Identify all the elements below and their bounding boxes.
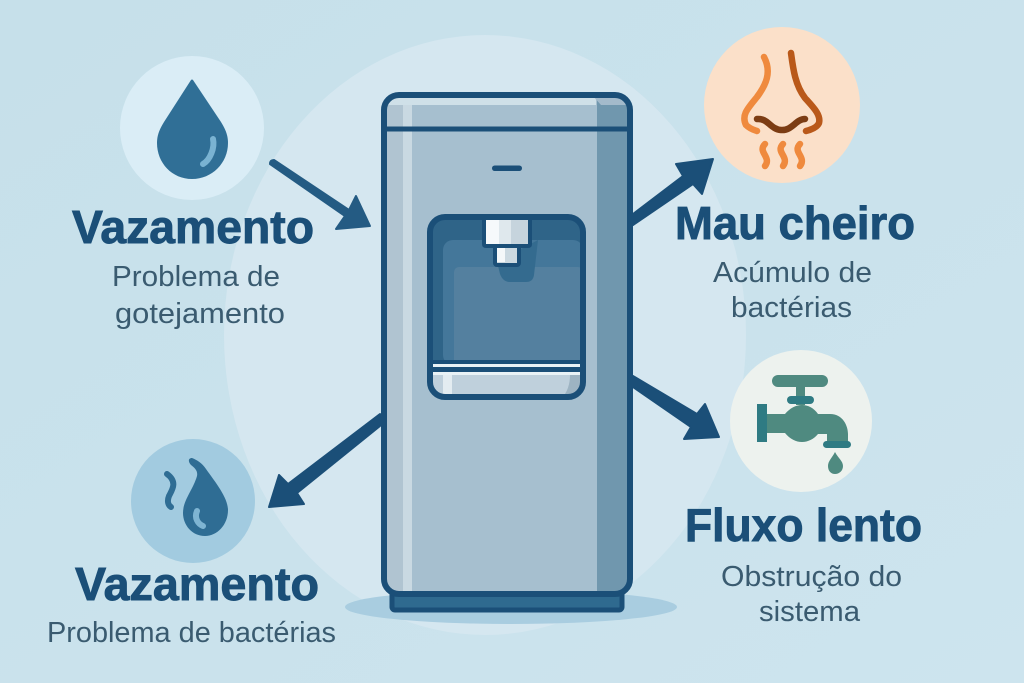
arrow: bottom right — [633, 376, 719, 439]
arrow: top right — [633, 159, 713, 225]
heading: Vazamento — [75, 558, 319, 610]
dispenser window — [430, 217, 583, 397]
icon: water drop — [120, 56, 264, 200]
panel: mau cheiro — [675, 27, 915, 324]
description: gotejamento — [115, 298, 285, 330]
heading: Vazamento — [72, 201, 314, 253]
indicator — [492, 166, 522, 171]
arrow: top left — [270, 160, 370, 229]
description: Problema de — [112, 261, 280, 293]
cooler base — [392, 590, 622, 610]
description: sistema — [759, 596, 861, 628]
water cooler — [384, 95, 633, 610]
heading: Mau cheiro — [675, 197, 915, 249]
description: bactérias — [731, 292, 852, 324]
nozzle — [484, 218, 530, 265]
cooler body — [384, 95, 633, 594]
heading: Fluxo lento — [685, 499, 922, 551]
description: Obstrução do — [721, 561, 902, 593]
description — [112, 261, 285, 330]
description: Acúmulo de — [713, 257, 872, 289]
nozzle shadow — [497, 240, 538, 282]
icon: nose — [704, 27, 860, 183]
panel: fluxo lento — [685, 350, 922, 628]
top band line — [384, 126, 630, 132]
base shadow — [345, 590, 677, 624]
background circle — [224, 35, 746, 635]
description — [721, 561, 902, 628]
panel: bottom left vazamento — [47, 439, 336, 649]
icon: drop with odour — [131, 439, 255, 563]
description — [713, 257, 872, 324]
arrow: bottom left — [269, 414, 380, 507]
panel: top left vazamento — [72, 56, 314, 330]
description: Problema de bactérias — [47, 617, 336, 649]
icon: faucet — [730, 350, 872, 492]
